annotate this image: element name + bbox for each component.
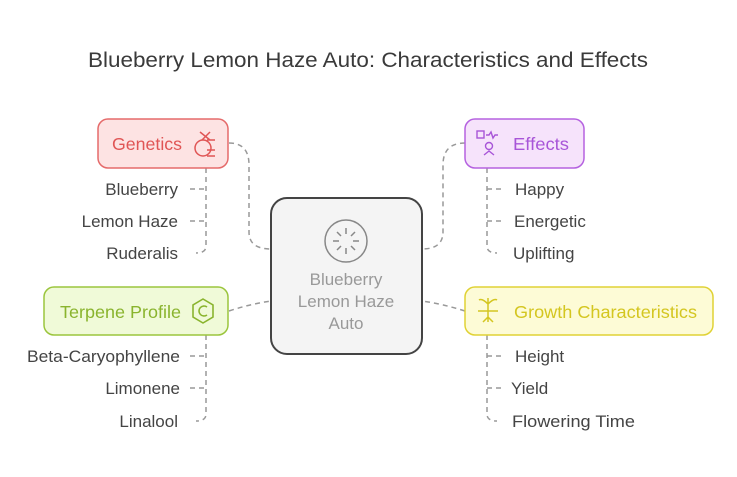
icon: effects xyxy=(477,131,498,155)
panel: center: Auto xyxy=(329,314,363,333)
panel: genetics: Blueberry xyxy=(105,180,178,199)
panel: center: Lemon Haze xyxy=(298,292,394,311)
panel: terpene: Terpene Profile xyxy=(60,302,181,322)
panel: effects: Effects xyxy=(513,134,569,154)
panel: terpene: Limonene xyxy=(105,379,180,398)
panel: growth xyxy=(465,287,713,431)
panel: growth: Height xyxy=(515,347,564,366)
panel: genetics: Genetics xyxy=(112,134,182,154)
panel: center: Blueberry xyxy=(310,270,383,289)
panel: genetics: Ruderalis xyxy=(106,244,178,263)
panel: effects: Uplifting xyxy=(513,244,574,263)
panel: terpene xyxy=(27,287,228,431)
title: Blueberry Lemon Haze Auto: Characteristics and Effects xyxy=(88,49,648,72)
icon: dna apple xyxy=(195,132,215,156)
panel: effects: Energetic xyxy=(514,212,586,231)
panel: genetics xyxy=(82,119,228,263)
panel: effects xyxy=(465,119,586,263)
panel: genetics: Lemon Haze xyxy=(82,212,178,231)
panel: growth: Flowering Time xyxy=(512,412,635,431)
panel: growth: Growth Characteristics xyxy=(514,302,697,322)
panel: terpene: Beta-Caryophyllene xyxy=(27,347,180,366)
panel: growth: Yield xyxy=(511,379,548,398)
icon: plant xyxy=(478,298,498,322)
connectors xyxy=(190,143,503,421)
icon: hexagon C xyxy=(193,299,213,323)
panel: terpene: Linalool xyxy=(119,412,178,431)
panel: center xyxy=(271,198,422,354)
icon: center xyxy=(325,220,367,262)
panel: effects: Happy xyxy=(515,180,565,199)
